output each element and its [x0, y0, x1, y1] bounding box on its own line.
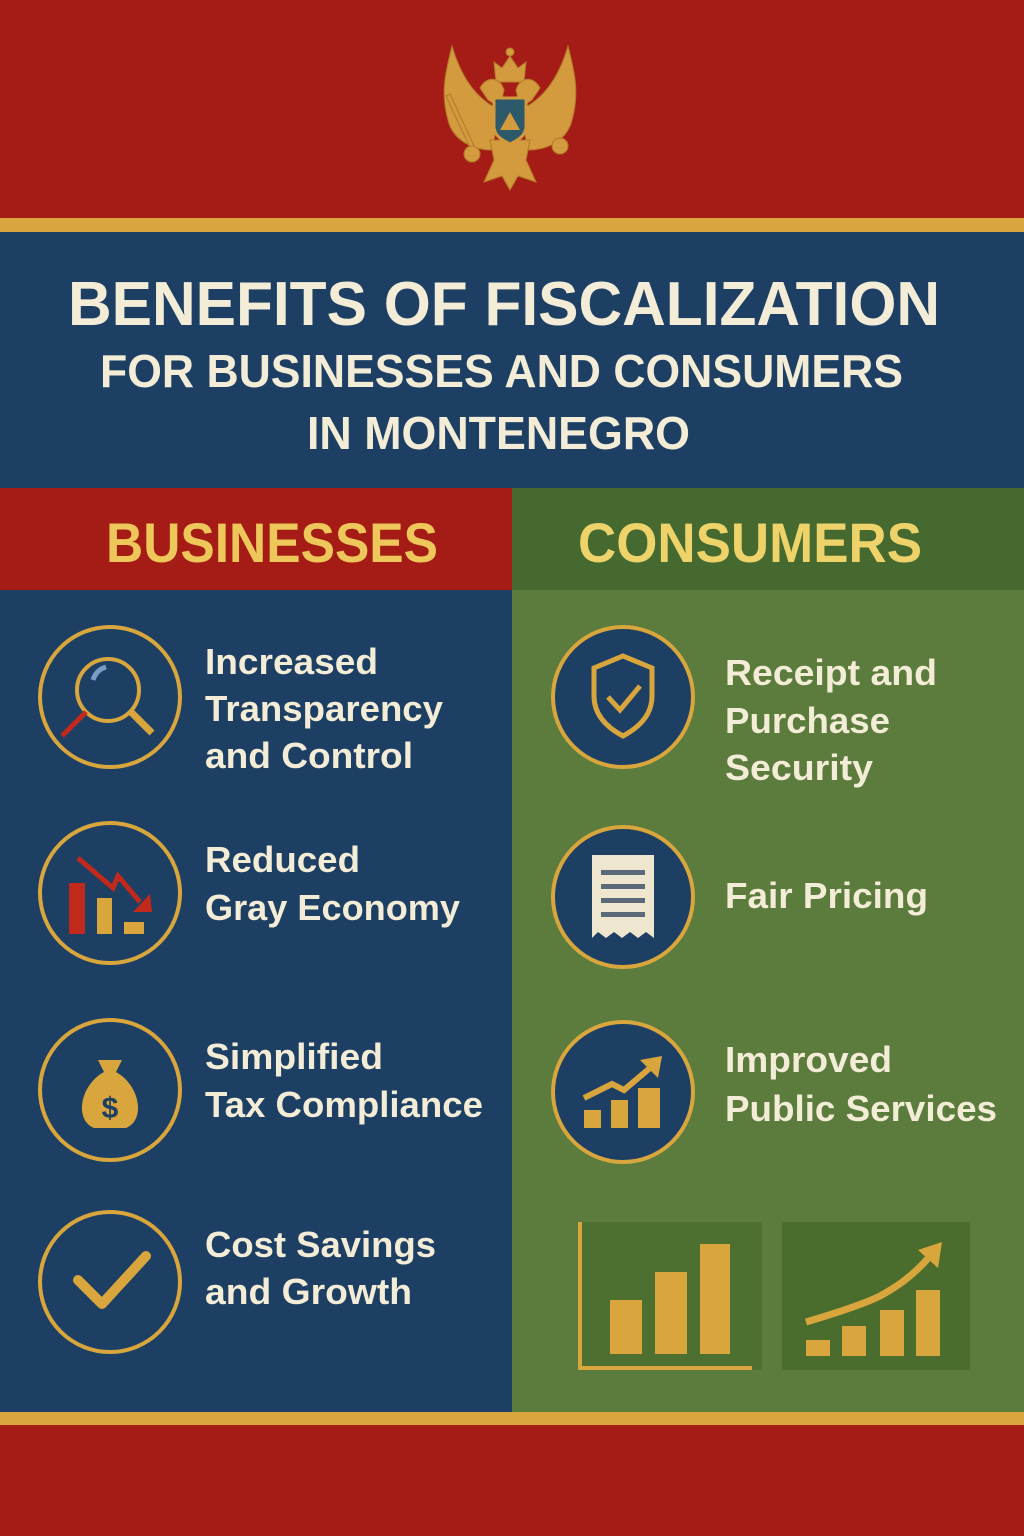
text: transparency [205, 641, 443, 776]
subtitle: FOR BUSINESSES AND CONSUMERS [100, 345, 903, 397]
text: public services [725, 1039, 997, 1129]
scepter [446, 94, 476, 152]
text: transparency: Transparency [205, 688, 443, 729]
title panel: IN MONTENEGRO [307, 407, 690, 459]
text: fair pricing: Fair Pricing [725, 875, 928, 916]
icon: growth chart [553, 1022, 693, 1162]
panel: businesses [0, 488, 512, 1412]
orb [552, 138, 568, 154]
text: cost savings [205, 1224, 436, 1312]
icon: money bag: $ [102, 1092, 119, 1125]
title: BENEFITS OF FISCALIZATION [68, 270, 940, 339]
text: tax compliance: Tax Compliance [205, 1084, 483, 1125]
icon: magnifier [40, 627, 180, 767]
text: cost savings: Cost Savings [205, 1224, 436, 1265]
crown [494, 56, 526, 82]
coat of arms [444, 46, 576, 190]
right wing [520, 46, 576, 150]
panel: consumers [512, 488, 1024, 1412]
chart: trend chart [782, 1222, 970, 1370]
text: transparency: Increased [205, 641, 378, 682]
heads [480, 79, 504, 108]
text: public services: Improved [725, 1039, 892, 1080]
text: tax compliance: Simplified [205, 1036, 383, 1077]
top red band [0, 0, 1024, 218]
icon: money bag [40, 1020, 180, 1160]
icon: shield [553, 627, 693, 767]
heading: consumers: CONSUMERS [578, 511, 922, 574]
heading: businesses: BUSINESSES [106, 511, 438, 574]
body & tail [484, 140, 536, 190]
left wing [444, 46, 500, 150]
text: receipt security [725, 652, 937, 788]
icon: check [40, 1212, 180, 1352]
gold stripe top [0, 218, 1024, 232]
text: gray economy: Gray Economy [205, 887, 460, 928]
text: receipt security: Purchase [725, 700, 890, 741]
text: gray economy: Reduced [205, 839, 360, 880]
chart: bar chart [578, 1222, 762, 1370]
text: public services: Public Services [725, 1088, 997, 1129]
icon: receipt [553, 827, 693, 967]
text: receipt security: Security [725, 747, 873, 788]
text: transparency: and Control [205, 735, 413, 776]
text: gray economy [205, 839, 460, 928]
gold stripe bottom [0, 1412, 1024, 1425]
icon: declining chart [40, 823, 180, 963]
title panel [0, 232, 1024, 488]
text: tax compliance [205, 1036, 483, 1125]
text: receipt security: Receipt and [725, 652, 937, 693]
bottom red band [0, 1425, 1024, 1536]
text: cost savings: and Growth [205, 1271, 412, 1312]
shield [494, 98, 526, 144]
